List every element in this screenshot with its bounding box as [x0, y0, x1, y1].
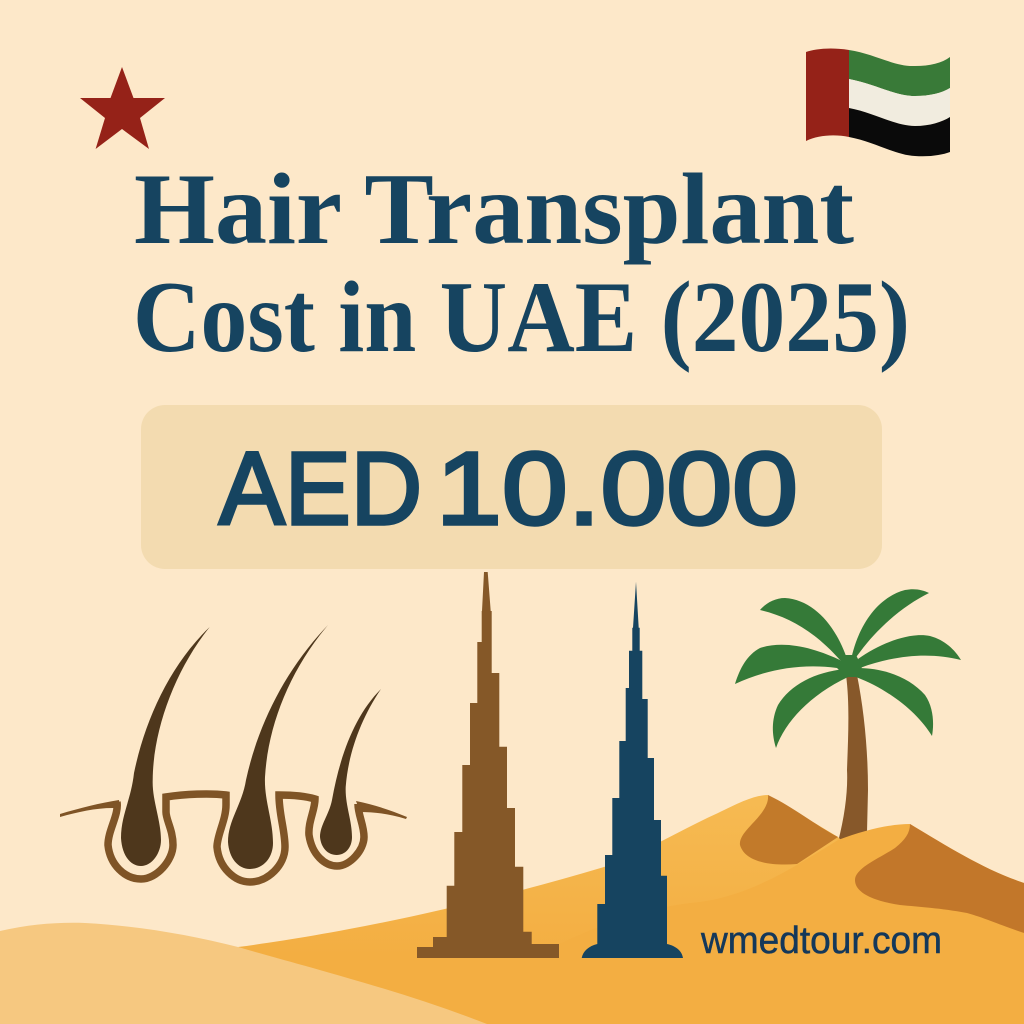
price panel: AED: [219, 431, 422, 546]
icon: brown tower: [417, 572, 559, 958]
icon: hair follicles: [60, 625, 407, 882]
desert dunes: [0, 795, 1024, 1024]
icon: blue tower: [582, 582, 683, 958]
website label: wmedtour.com: [700, 920, 942, 962]
price panel: 10.000: [436, 431, 798, 546]
icon: palm tree: [735, 589, 961, 842]
title: Hair Transplant: [134, 153, 854, 266]
title: Cost in UAE (2025): [133, 261, 910, 374]
icon: red star: [80, 67, 165, 149]
icon: UAE flag: [806, 49, 950, 156]
title: [133, 153, 910, 374]
price panel: [141, 405, 882, 569]
